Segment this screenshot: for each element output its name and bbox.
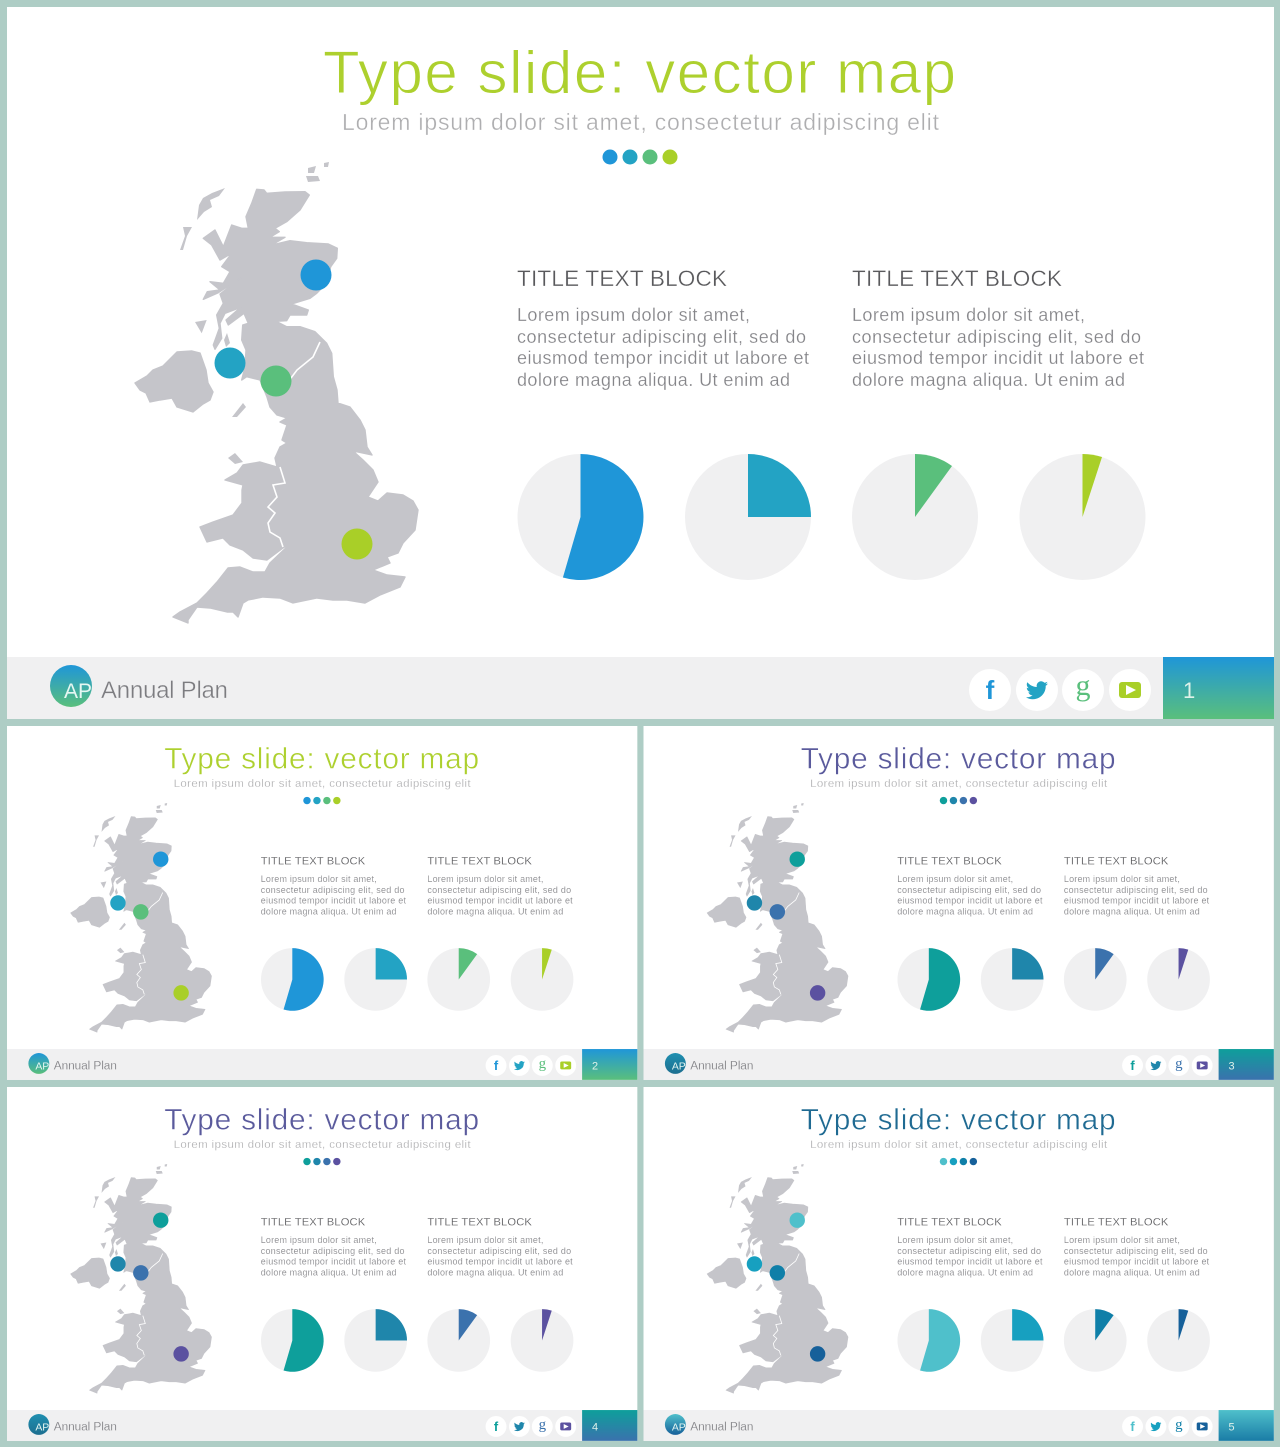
text block left: eiusmod tempor incidit ut labore et: [261, 895, 407, 905]
subtitle: Lorem ipsum dolor sit amet, consectetur adipiscing elit: [342, 109, 940, 135]
footer bar: [644, 1410, 1274, 1441]
text block right: Lorem ipsum dolor sit amet,: [1064, 874, 1180, 884]
text block right: consectetur adipiscing elit, sed do: [427, 1246, 571, 1256]
footer bar: [644, 1049, 1274, 1080]
text block right: eiusmod tempor incidit ut labore et: [1064, 895, 1210, 905]
footer bar: g: [539, 1417, 547, 1433]
footer bar: f: [1130, 1419, 1135, 1434]
text block right: dolore magna aliqua. Ut enim ad: [427, 1267, 563, 1277]
text block left: [897, 1217, 1043, 1277]
title: Type slide: vector map: [164, 743, 479, 776]
text block left: TITLE TEXT BLOCK: [261, 856, 366, 868]
footer bar: g: [1175, 1417, 1183, 1433]
pie charts: [261, 948, 573, 1011]
map markers: [110, 1212, 189, 1362]
text block left: dolore magna aliqua. Ut enim ad: [261, 1267, 397, 1277]
footer bar: f: [494, 1058, 499, 1073]
map markers: [747, 851, 825, 1001]
decorative dots row: [303, 797, 341, 804]
map markers: [110, 851, 189, 1001]
footer bar: [7, 1049, 637, 1080]
text block left: eiusmod tempor incidit ut labore et: [897, 1256, 1043, 1266]
text block left: TITLE TEXT BLOCK: [897, 856, 1002, 868]
text block left: eiusmod tempor incidit ut labore et: [517, 348, 809, 368]
map markers: [214, 260, 372, 560]
slide 1: large green theme: [7, 7, 1274, 719]
text block right: consectetur adipiscing elit, sed do: [1064, 885, 1208, 895]
footer bar: Annual Plan: [54, 1058, 117, 1072]
text block right: Lorem ipsum dolor sit amet,: [1064, 1235, 1180, 1245]
footer bar: f: [986, 675, 995, 705]
text block left: consectetur adipiscing elit, sed do: [897, 1246, 1041, 1256]
footer bar: AP: [35, 1061, 49, 1072]
footer bar: [7, 1410, 637, 1441]
footer bar: 2: [592, 1060, 598, 1072]
text block right: consectetur adipiscing elit, sed do: [1064, 1246, 1208, 1256]
footer bar: Annual Plan: [101, 677, 228, 704]
subtitle: Lorem ipsum dolor sit amet, consectetur adipiscing elit: [174, 778, 471, 790]
text block right: dolore magna aliqua. Ut enim ad: [852, 370, 1125, 390]
title: Type slide: vector map: [801, 1104, 1116, 1137]
text block right: [427, 856, 573, 916]
footer bar: f: [494, 1419, 499, 1434]
text block left: TITLE TEXT BLOCK: [897, 1217, 1002, 1229]
subtitle: Lorem ipsum dolor sit amet, consectetur adipiscing elit: [810, 778, 1108, 790]
text block left: eiusmod tempor incidit ut labore et: [261, 1256, 407, 1266]
footer bar: 5: [1229, 1421, 1235, 1433]
pie charts: [261, 1309, 573, 1372]
text block left: consectetur adipiscing elit, sed do: [261, 885, 405, 895]
text block right: [427, 1217, 573, 1277]
footer bar: 3: [1229, 1060, 1235, 1072]
text block right: TITLE TEXT BLOCK: [427, 1217, 532, 1229]
UK map: [71, 803, 211, 1032]
footer bar: Annual Plan: [54, 1419, 117, 1433]
text block left: consectetur adipiscing elit, sed do: [517, 327, 806, 347]
pie charts: [518, 454, 1146, 580]
text block left: dolore magna aliqua. Ut enim ad: [517, 370, 790, 390]
UK map: [707, 1164, 848, 1393]
text block left: consectetur adipiscing elit, sed do: [897, 885, 1041, 895]
pie charts: [897, 1309, 1210, 1372]
pie charts: [897, 948, 1210, 1011]
slide 4: small purple theme: [7, 1087, 637, 1441]
subtitle: Lorem ipsum dolor sit amet, consectetur adipiscing elit: [810, 1139, 1108, 1151]
text block right: dolore magna aliqua. Ut enim ad: [1064, 1267, 1200, 1277]
text block right: consectetur adipiscing elit, sed do: [852, 327, 1141, 347]
text block right: TITLE TEXT BLOCK: [1064, 1217, 1169, 1229]
text block left: Lorem ipsum dolor sit amet,: [261, 1235, 377, 1245]
footer bar: 1: [1183, 678, 1195, 703]
text block right: Lorem ipsum dolor sit amet,: [427, 1235, 543, 1245]
decorative dots row: [303, 1158, 341, 1165]
footer bar: Annual Plan: [690, 1419, 753, 1433]
text block right: eiusmod tempor incidit ut labore et: [427, 1256, 573, 1266]
text block right: TITLE TEXT BLOCK: [852, 266, 1062, 291]
footer bar: [7, 657, 1274, 719]
text block right: eiusmod tempor incidit ut labore et: [852, 348, 1144, 368]
slide 5: small blue theme: [644, 1087, 1274, 1441]
footer bar: AP: [35, 1422, 49, 1433]
text block right: dolore magna aliqua. Ut enim ad: [427, 906, 563, 916]
text block left: [261, 1217, 407, 1277]
footer bar: f: [1130, 1058, 1135, 1073]
subtitle: Lorem ipsum dolor sit amet, consectetur adipiscing elit: [174, 1139, 471, 1151]
text block left: Lorem ipsum dolor sit amet,: [517, 305, 750, 325]
title: Type slide: vector map: [323, 39, 956, 106]
text block left: [261, 856, 407, 916]
text block left: [517, 266, 809, 390]
text block right: Lorem ipsum dolor sit amet,: [852, 305, 1085, 325]
text block right: [1064, 856, 1210, 916]
decorative dots row: [940, 1158, 977, 1165]
title: Type slide: vector map: [801, 743, 1116, 776]
footer bar: Annual Plan: [690, 1058, 753, 1072]
text block left: dolore magna aliqua. Ut enim ad: [261, 906, 397, 916]
decorative dots row: [940, 797, 977, 804]
UK map: [71, 1164, 211, 1393]
text block left: TITLE TEXT BLOCK: [517, 266, 727, 291]
text block left: eiusmod tempor incidit ut labore et: [897, 895, 1043, 905]
text block left: TITLE TEXT BLOCK: [261, 1217, 366, 1229]
footer bar: g: [1076, 669, 1090, 702]
footer bar: 4: [592, 1421, 598, 1433]
slide 2: small green theme: [7, 726, 637, 1080]
text block right: TITLE TEXT BLOCK: [1064, 856, 1169, 868]
text block left: dolore magna aliqua. Ut enim ad: [897, 906, 1033, 916]
text block right: eiusmod tempor incidit ut labore et: [427, 895, 573, 905]
footer bar: AP: [64, 680, 92, 703]
text block right: dolore magna aliqua. Ut enim ad: [1064, 906, 1200, 916]
text block left: Lorem ipsum dolor sit amet,: [261, 874, 377, 884]
text block left: dolore magna aliqua. Ut enim ad: [897, 1267, 1033, 1277]
text block right: eiusmod tempor incidit ut labore et: [1064, 1256, 1210, 1266]
map markers: [747, 1212, 825, 1362]
text block left: Lorem ipsum dolor sit amet,: [897, 1235, 1013, 1245]
UK map: [707, 803, 848, 1032]
text block right: TITLE TEXT BLOCK: [427, 856, 532, 868]
text block left: [897, 856, 1043, 916]
UK map: [135, 162, 418, 623]
text block left: Lorem ipsum dolor sit amet,: [897, 874, 1013, 884]
footer bar: AP: [672, 1061, 686, 1072]
text block right: Lorem ipsum dolor sit amet,: [427, 874, 543, 884]
slide 3: small purple theme: [644, 726, 1274, 1080]
text block right: consectetur adipiscing elit, sed do: [427, 885, 571, 895]
text block right: [852, 266, 1144, 390]
footer bar: AP: [672, 1422, 686, 1433]
title: Type slide: vector map: [164, 1104, 479, 1137]
text block right: [1064, 1217, 1210, 1277]
footer bar: g: [1175, 1056, 1183, 1072]
text block left: consectetur adipiscing elit, sed do: [261, 1246, 405, 1256]
footer bar: g: [539, 1056, 547, 1072]
decorative dots row: [602, 150, 678, 164]
